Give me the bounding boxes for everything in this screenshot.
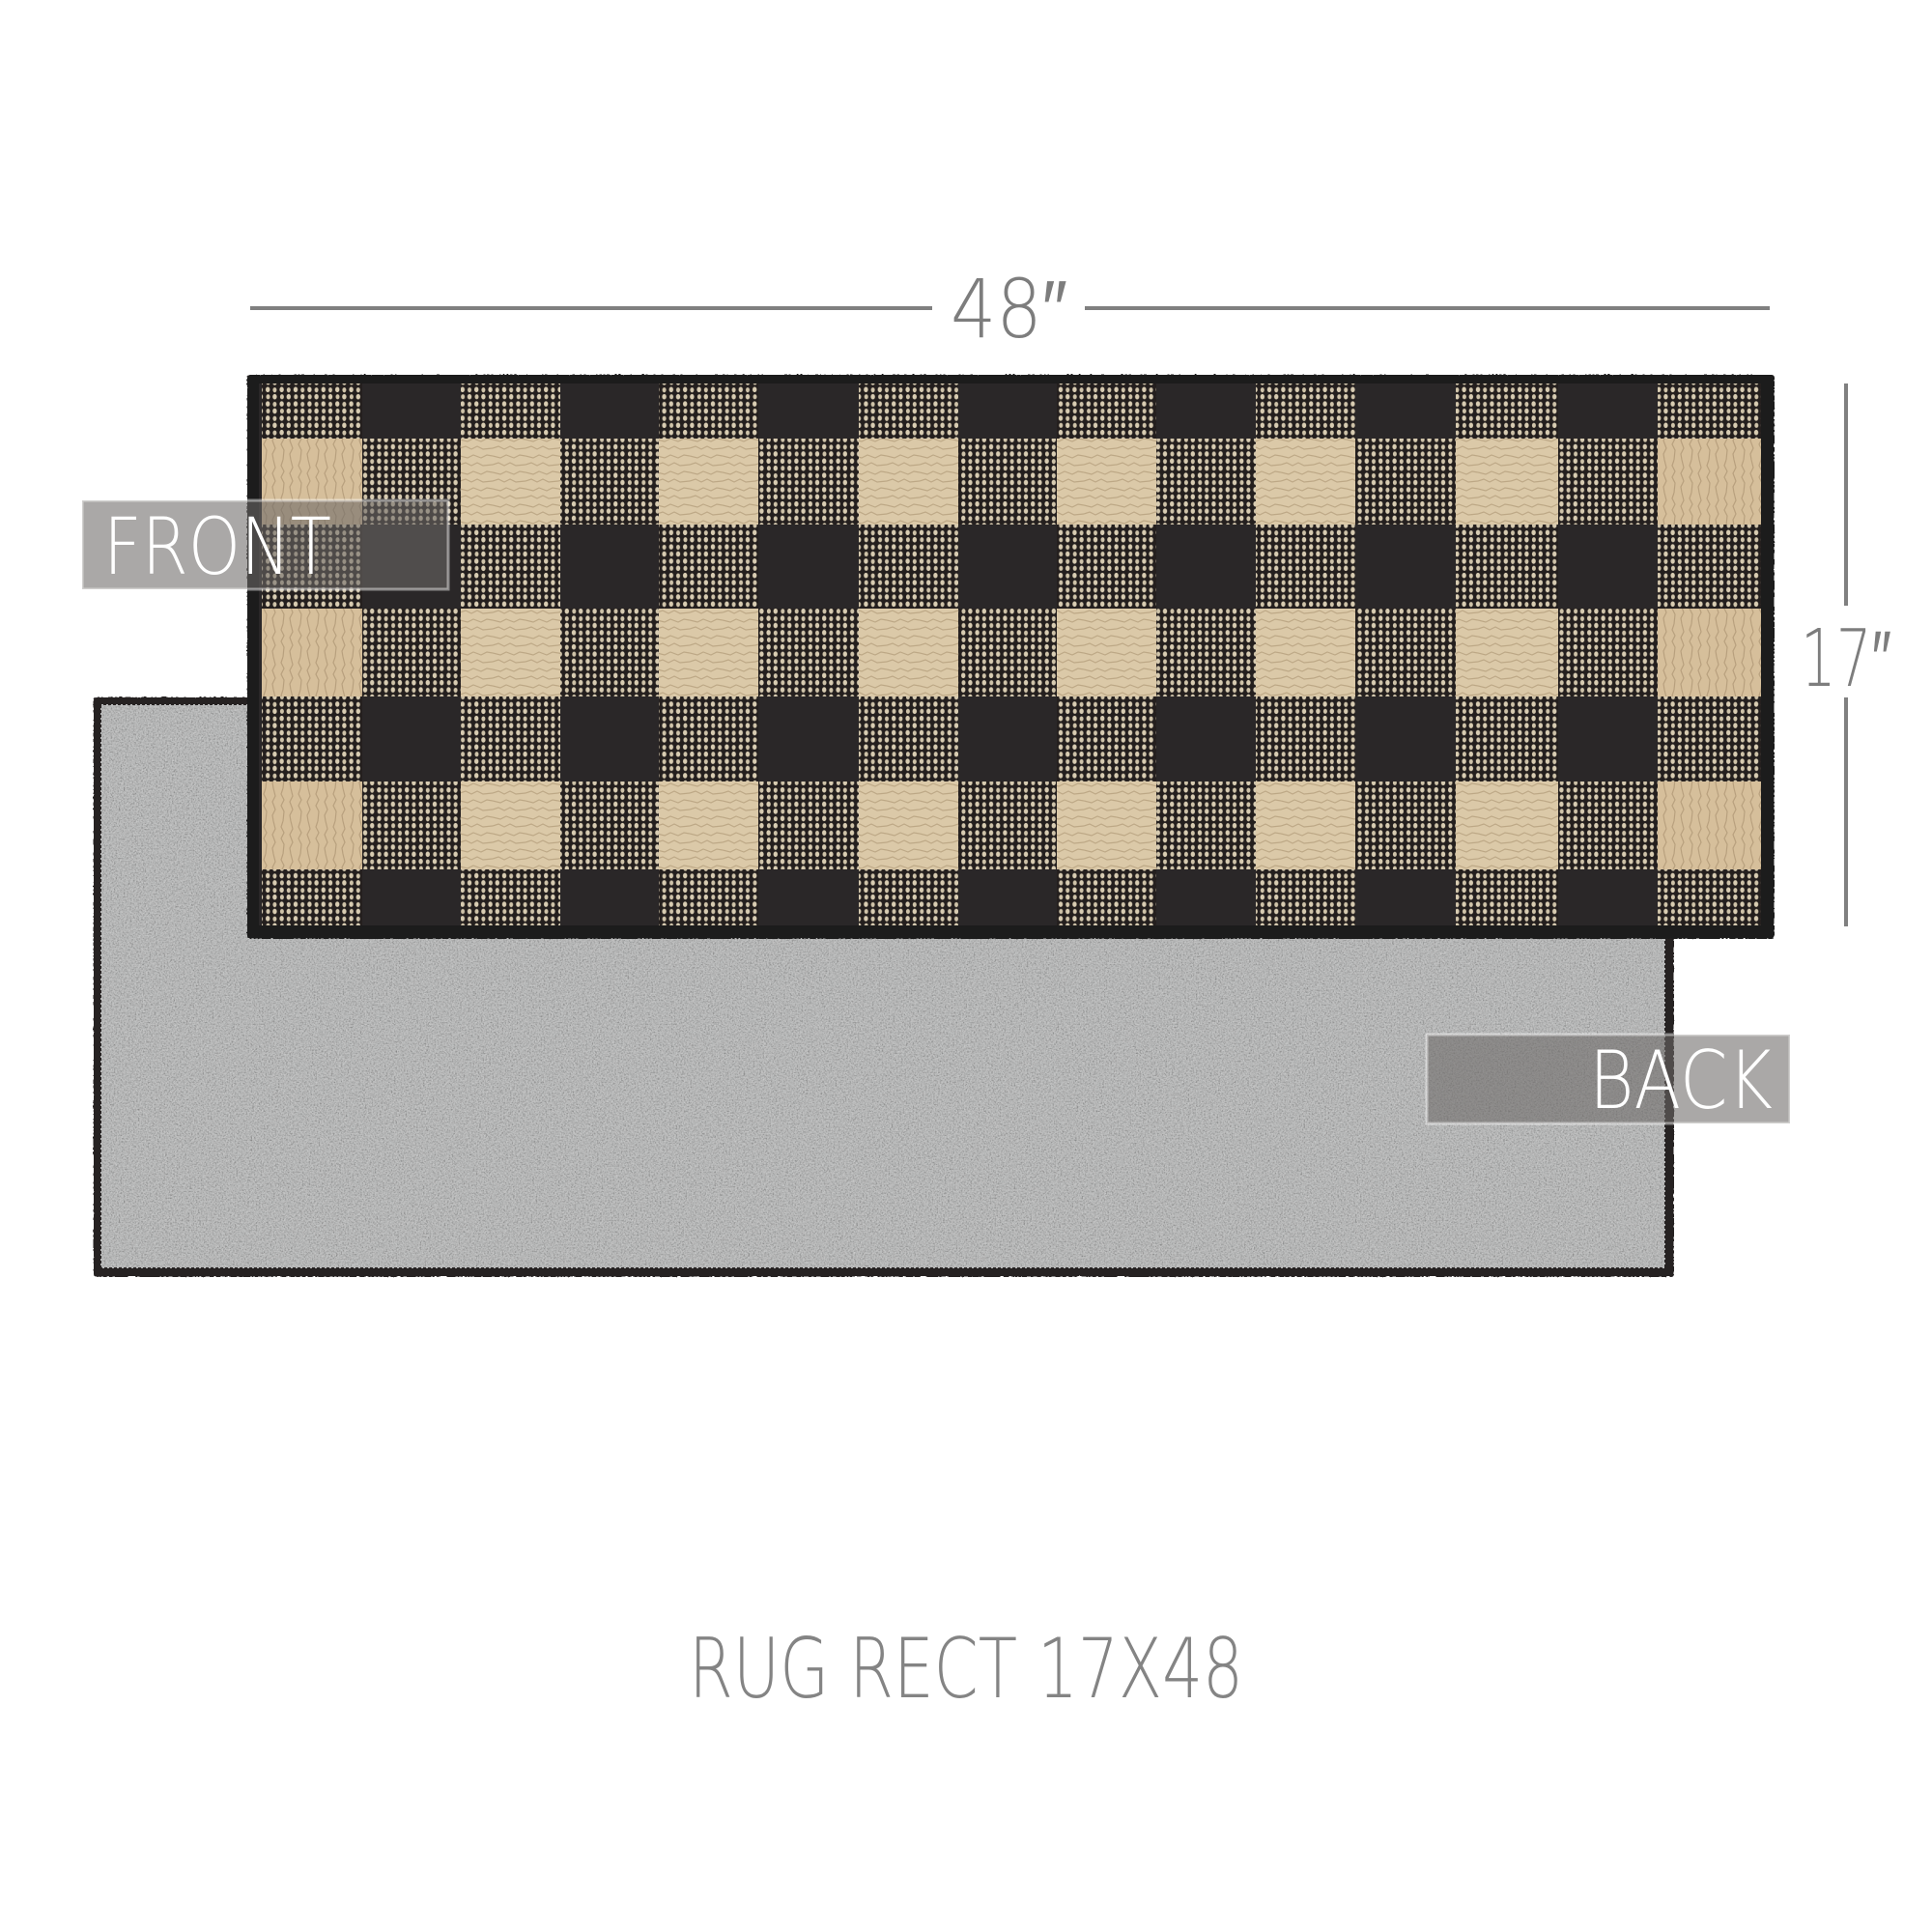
row 3: [262, 525, 1761, 609]
dimension label: 48 inches: 48″: [951, 262, 1067, 356]
row 2: [262, 439, 1761, 525]
dimension line: height bottom segment: [1844, 697, 1848, 926]
row 7: [262, 869, 1761, 925]
BACK label text: BACK: [1589, 1034, 1773, 1127]
dimension line: width left segment: [250, 306, 932, 310]
row 5: [262, 696, 1761, 781]
row 6: [262, 781, 1761, 869]
dimension line: width right segment: [1085, 306, 1770, 310]
back rug grey surface: [101, 705, 1664, 1267]
dimension line: height top segment: [1844, 384, 1848, 606]
back rug light grain texture: [101, 705, 1664, 1267]
row 4: [262, 609, 1761, 696]
front rug check rows: [259, 384, 1761, 925]
label: FRONT: [82, 500, 448, 593]
dimension label: 17 inches: 17″: [1801, 613, 1891, 705]
front rug binding edge: [246, 374, 1774, 938]
FRONT label plate: [82, 500, 448, 589]
label: BACK: [1427, 1034, 1790, 1127]
title: product name: RUG RECT 17X48: [689, 1621, 1243, 1718]
back rug binding edge: [93, 696, 1673, 1276]
row 1: [262, 384, 1761, 439]
back rug dark grain texture: [101, 705, 1664, 1267]
panel: back of rug: [93, 696, 1673, 1276]
FRONT label text: FRONT: [103, 502, 331, 593]
panel: front of rug: [246, 374, 1774, 938]
BACK label plate: [1427, 1035, 1790, 1123]
